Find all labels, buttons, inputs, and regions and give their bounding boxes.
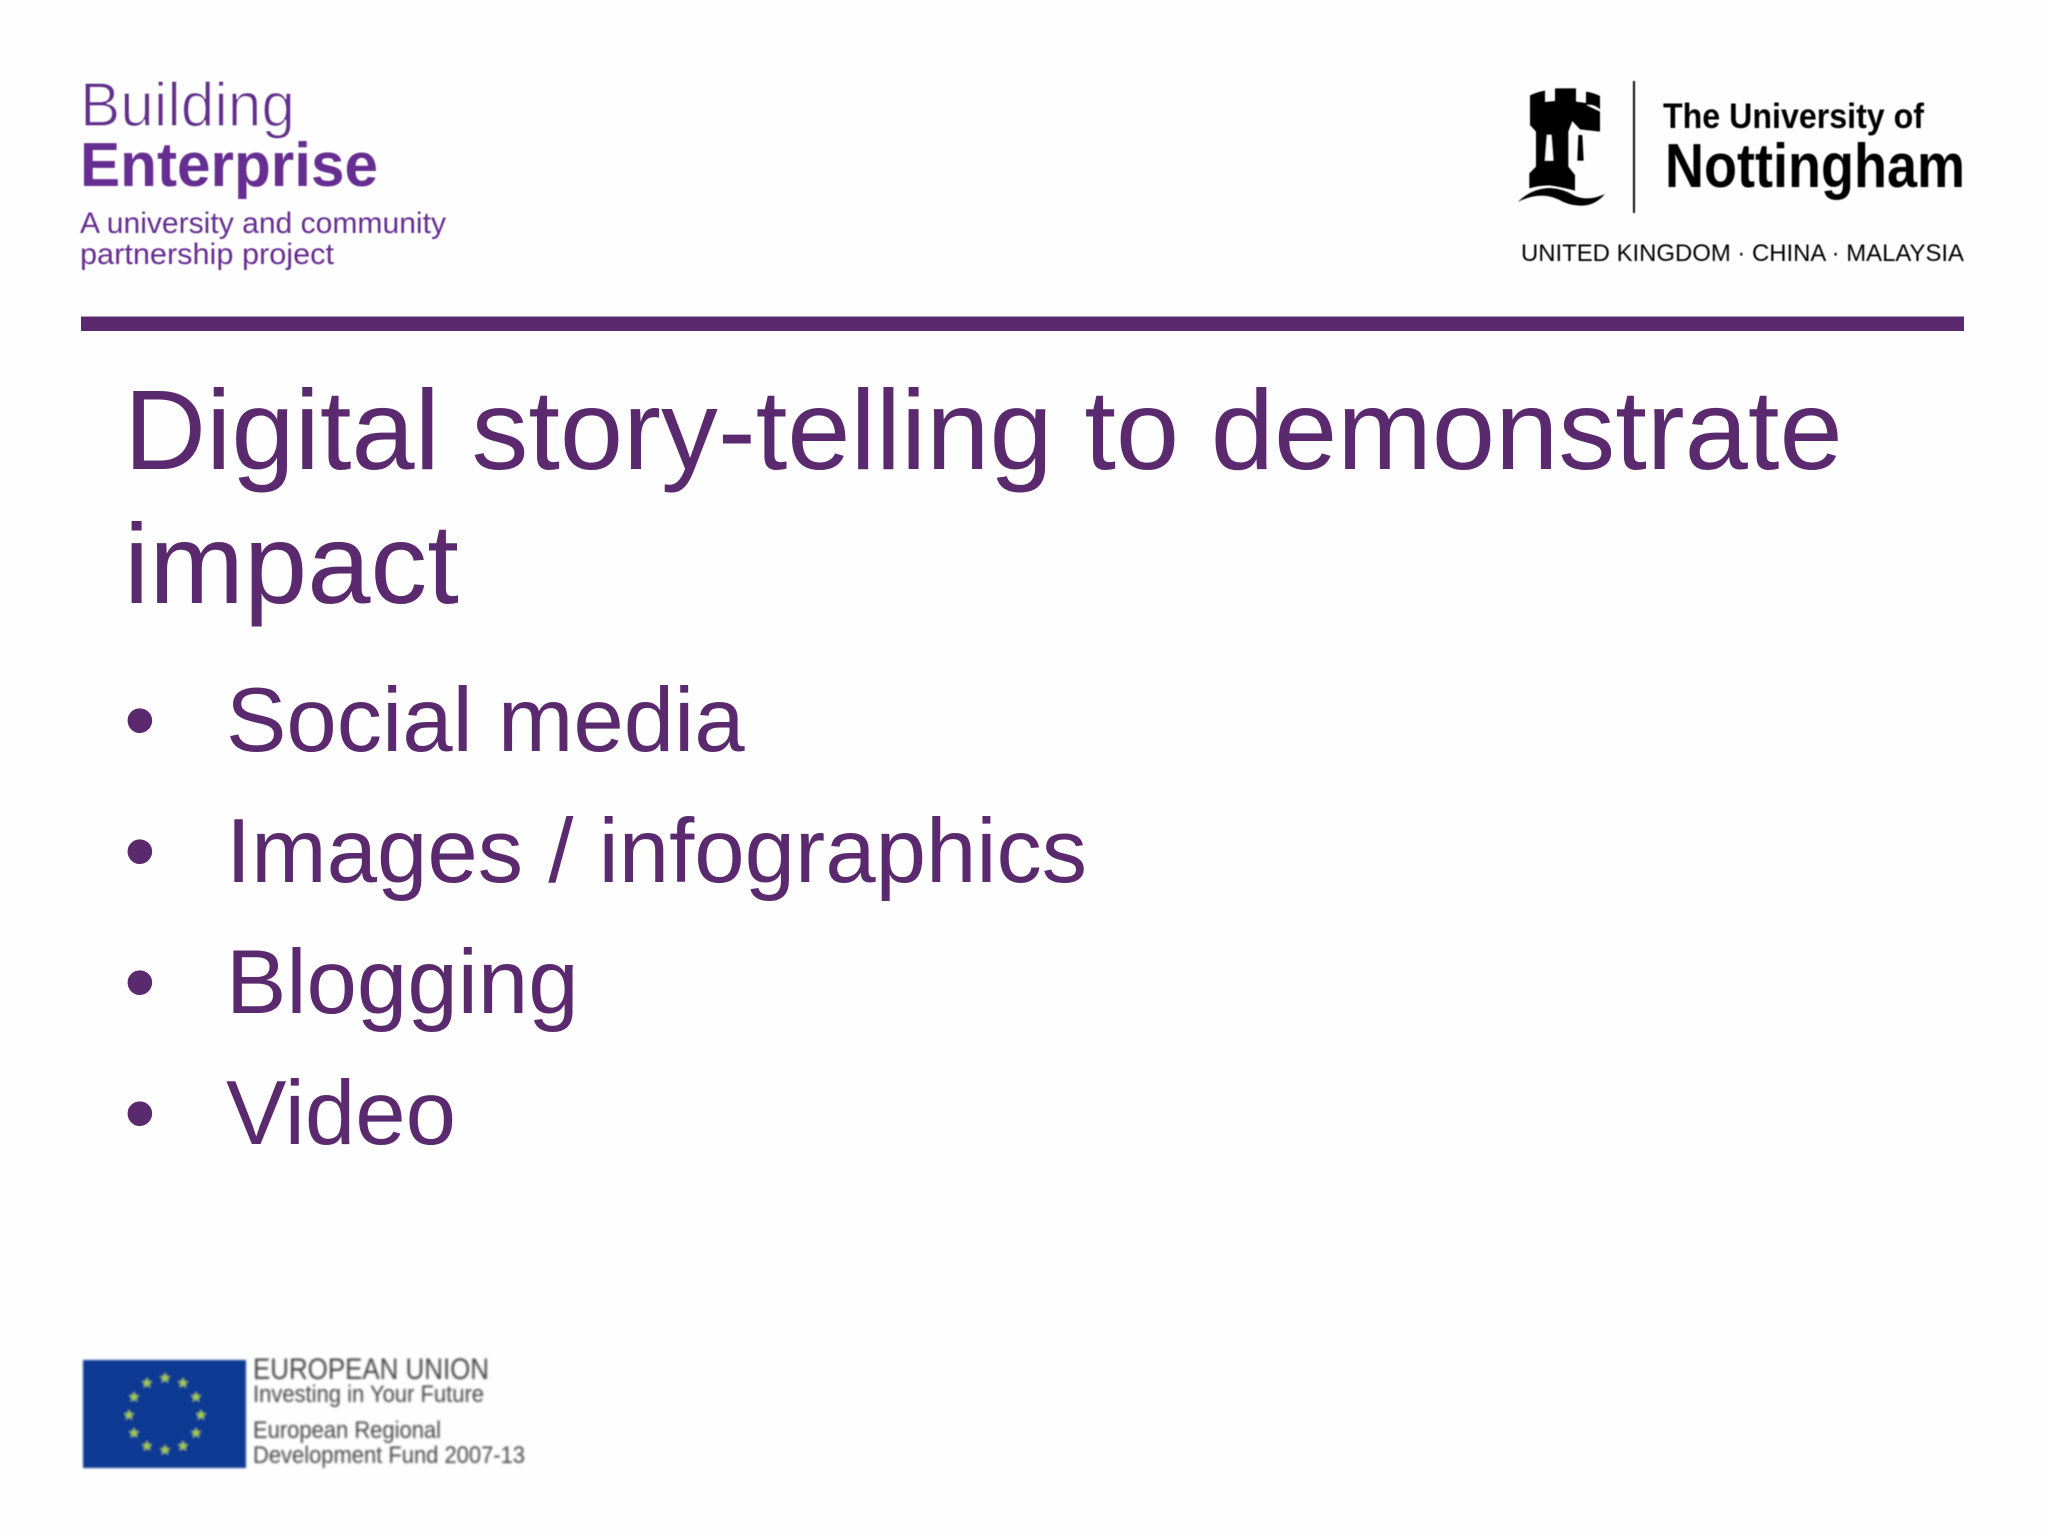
bullet: Video — [124, 1063, 456, 1164]
logo: Building Enterprise: Enterprise — [80, 131, 378, 200]
bullet: Video: • — [124, 1063, 156, 1164]
bullet: Social media: Social media — [226, 670, 745, 771]
EU text: European Regional — [253, 1417, 441, 1444]
icon: castle tower — [1518, 88, 1605, 206]
logo: Building Enterprise: A university and community — [80, 207, 446, 240]
bullet list — [124, 670, 1087, 1164]
bullet: Images / infographics: Images / infographics — [226, 801, 1087, 902]
wordmark: The University of — [1663, 97, 1924, 136]
title: Digital story-telling to demonstrate — [124, 367, 1843, 494]
logo: Building Enterprise: Building — [80, 71, 295, 140]
title: impact — [124, 501, 459, 628]
header rule — [81, 316, 1964, 331]
EU text: Development Fund 2007-13 — [253, 1442, 525, 1469]
logo: Building Enterprise — [80, 71, 446, 271]
bullet: Social media: • — [124, 670, 156, 771]
bullet: Images / infographics: • — [124, 801, 156, 902]
locations line: UNITED KINGDOM · CHINA · MALAYSIA — [1521, 240, 1964, 267]
logo: European Union — [83, 1353, 525, 1469]
EU text — [253, 1353, 525, 1469]
EU text: EUROPEAN UNION — [253, 1353, 489, 1386]
logo: The University of Nottingham: Nottingham — [1665, 132, 1965, 201]
logo: Building Enterprise: partnership project — [80, 238, 335, 271]
bullet: Video: Video — [226, 1063, 456, 1164]
icon: EU flag — [83, 1360, 246, 1468]
bullet: Blogging: • — [124, 932, 156, 1033]
bullet: Blogging: Blogging — [226, 932, 579, 1033]
EU text: Investing in Your Future — [253, 1381, 484, 1408]
logo: The University of Nottingham — [1518, 81, 1965, 267]
divider — [1633, 81, 1635, 213]
title — [124, 367, 1843, 628]
